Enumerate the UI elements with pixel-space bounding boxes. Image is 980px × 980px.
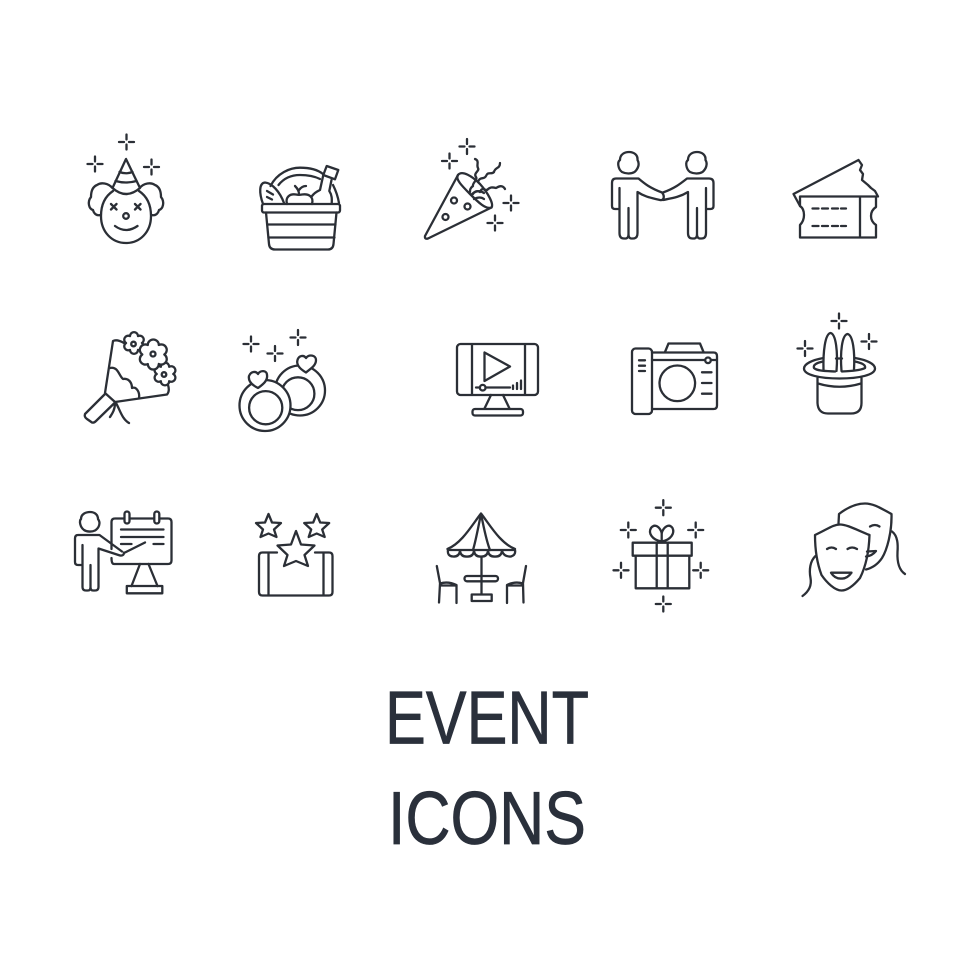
icon: camera: [632, 344, 717, 414]
icon: magic hat: [798, 314, 876, 414]
icon: party clown: [88, 134, 163, 243]
icon: stars above stage: [256, 514, 332, 596]
icon: cafe table with umbrella: [437, 514, 526, 603]
icon: picnic basket: [260, 166, 340, 250]
icon: flower bouquet: [85, 332, 175, 423]
icon: handshake: [612, 152, 714, 238]
icon: video monitor: [457, 344, 538, 416]
icon: wedding rings: [240, 330, 325, 431]
title: ICONS: [388, 776, 586, 860]
icon: presenter with board: [75, 512, 172, 593]
title: [385, 676, 589, 860]
icon: gift box: [614, 500, 708, 612]
title: EVENT: [385, 676, 589, 760]
icon: theatre masks: [802, 504, 905, 596]
icon: ticket: [794, 160, 878, 238]
icon: party popper: [425, 139, 518, 239]
